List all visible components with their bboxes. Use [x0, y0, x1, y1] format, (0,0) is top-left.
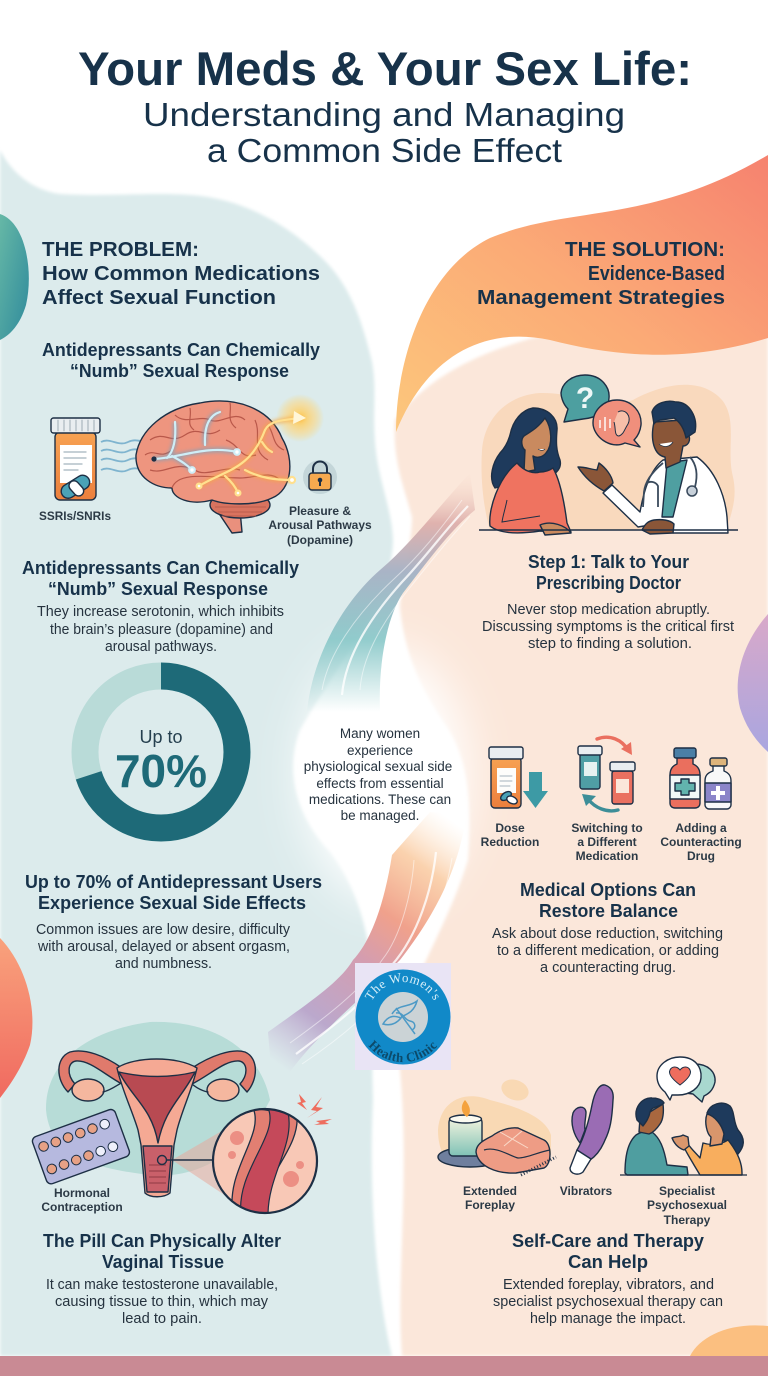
icon: couple in therapy [620, 1057, 747, 1175]
woman hair [492, 408, 560, 488]
text block: antidepressants explanation [22, 558, 299, 655]
right tube and ovary [192, 1051, 255, 1092]
doctor scrubs [662, 460, 687, 517]
speech bubbles with heart [678, 1064, 715, 1102]
labels: medical options: a Different [577, 835, 637, 849]
zoom wedge [172, 1125, 232, 1200]
flowing streaks [268, 473, 475, 1082]
icon: vibrator [570, 1085, 613, 1174]
text block: self-care: Can Help [568, 1252, 648, 1272]
subheading: antidepressants top: “Numb” Sexual Response [70, 361, 289, 381]
text block: antidepressants explanation: Antidepressants Can Chemically [22, 558, 299, 578]
icon: candle and blanket [438, 1076, 556, 1175]
title [78, 42, 692, 169]
text block: side effects prevalence: with arousal, delayed or absent orgasm, [37, 939, 290, 955]
panel: problem background [0, 150, 393, 1356]
heading: the problem: How Common Medications [42, 262, 320, 285]
doctor head [652, 420, 690, 468]
drug signal waves [101, 440, 156, 471]
text block: antidepressants explanation: the brain’s pleasure (dopamine) and [50, 622, 273, 638]
orange bottom blob [690, 1325, 768, 1356]
text block: step 1 [482, 552, 734, 652]
icon: brain with pathways [136, 394, 324, 533]
text block: side effects prevalence [25, 872, 322, 972]
labels: self-care [463, 1184, 727, 1227]
doctor coat [603, 457, 728, 533]
title: Your Meds & Your Sex Life: [78, 42, 692, 95]
center message: be managed. [341, 808, 419, 823]
uterus body [117, 1059, 197, 1197]
icon: padlock [303, 460, 337, 494]
magnified tissue circle [214, 1110, 316, 1212]
text block: the pill: The Pill Can Physically Alter [43, 1231, 281, 1251]
center message: effects from essential [316, 776, 444, 791]
labels: self-care: Extended [463, 1184, 517, 1198]
title: Understanding and Managing [143, 96, 625, 133]
text block: the pill: Vaginal Tissue [102, 1252, 224, 1272]
text block: self-care: help manage the impact. [530, 1311, 686, 1327]
upper ribbon [307, 473, 475, 712]
teal corner blob [0, 214, 29, 340]
illustration: patient and doctor [479, 375, 738, 535]
labels: medical options: Adding a [675, 821, 727, 835]
center message [304, 726, 452, 823]
text block: step 1: Never stop medication abruptly. [507, 602, 710, 618]
icon: dose reduction [489, 747, 548, 808]
text block: antidepressants explanation: arousal pathways. [105, 639, 217, 655]
left tube and ovary [59, 1051, 122, 1092]
purple side blob [738, 614, 768, 752]
illustration: uterus and tissue [46, 1022, 332, 1217]
heading: the solution: Evidence-Based [588, 262, 725, 285]
text block: self-care: Extended foreplay, vibrators, and [503, 1277, 714, 1293]
text block: side effects prevalence: Common issues are low desire, difficulty [36, 922, 291, 938]
logo: women's health clinic: The Women's [364, 973, 439, 1000]
text block: the pill: lead to pain. [122, 1311, 202, 1327]
labels: self-care: Vibrators [560, 1184, 613, 1198]
central white glow [303, 650, 467, 900]
text block: step 1: Discussing symptoms is the critical first [482, 619, 734, 635]
text block: medical options: a counteracting drug. [540, 960, 676, 976]
text block: medical options: Restore Balance [539, 901, 678, 921]
labels: medical options: Reduction [481, 835, 539, 849]
text block: medical options: Ask about dose reduction, switching [492, 926, 723, 942]
label: hormonal contraception [41, 1186, 123, 1214]
text block: self-care [493, 1231, 723, 1327]
serotonin pathways [154, 412, 237, 470]
illustration: patient and doctor: ? [576, 382, 594, 415]
center message: medications. These can [309, 792, 451, 807]
label: hormonal contraception: Contraception [41, 1200, 123, 1214]
text block: the pill: It can make testosterone unavailable, [46, 1277, 278, 1293]
icon: counteracting drugs [670, 748, 731, 809]
heading: the solution [477, 238, 725, 309]
text block: the pill: causing tissue to thin, which may [55, 1294, 269, 1310]
center message: physiological sexual side [304, 759, 452, 774]
label: pleasure and arousal pathways: Pleasure & [289, 504, 351, 518]
dopamine pathways [199, 418, 303, 493]
center message: Many women [340, 726, 420, 741]
label: pleasure and arousal pathways [268, 504, 372, 547]
labels: medical options [481, 821, 742, 863]
pleasure glow [276, 394, 324, 442]
labels: self-care: Psychosexual [647, 1198, 727, 1212]
donut chart: up to 70% [85, 676, 237, 828]
speech bubble: ear [593, 400, 641, 447]
label: pleasure and arousal pathways: Arousal Pathways [268, 518, 372, 532]
label: SSRIs/SNRIs: SSRIs/SNRIs [39, 509, 111, 523]
text block: medical options [492, 880, 723, 976]
subheading: antidepressants top [42, 340, 320, 381]
solution header blob [396, 155, 768, 432]
woman face [522, 418, 551, 472]
heading: the solution: THE SOLUTION: [565, 238, 725, 261]
labels: medical options: Medication [576, 849, 638, 863]
man sweater [625, 1131, 688, 1175]
heading: the problem [42, 238, 320, 309]
text block: antidepressants explanation: They increase serotonin, which inhibits [37, 604, 284, 620]
text block: medical options: to a different medication, or adding [497, 943, 719, 959]
coral side blob [0, 938, 32, 1098]
icon: SSRI pill bottle [51, 418, 100, 501]
subheading: antidepressants top: Antidepressants Can Chemically [42, 340, 320, 360]
labels: self-care: Foreplay [465, 1198, 515, 1212]
icon: pill blister pack [31, 1108, 131, 1185]
logo: women's health clinic: Health Clinic [368, 1040, 437, 1062]
text block: self-care: specialist psychosexual therapy can [493, 1294, 723, 1310]
text block: side effects prevalence: Up to 70% of Antidepressant Users [25, 872, 322, 892]
panel: solution background [395, 300, 768, 1356]
labels: medical options: Switching to [571, 821, 643, 835]
text block: step 1: Prescribing Doctor [536, 573, 681, 593]
text block: medical options: Medical Options Can [520, 880, 696, 900]
labels: self-care: Therapy [664, 1213, 711, 1227]
text block: step 1: Step 1: Talk to Your [528, 552, 689, 572]
text block: antidepressants explanation: “Numb” Sexual Response [48, 579, 268, 599]
donut chart: up to 70%: Up to [139, 727, 183, 747]
woman hair [707, 1103, 743, 1154]
heading: the solution: Management Strategies [477, 286, 725, 309]
woman sweater [684, 1140, 742, 1175]
icon: switching medication [578, 737, 635, 811]
bottom strip [0, 1356, 768, 1376]
woman sweater [490, 463, 571, 533]
labels: medical options: Drug [687, 849, 715, 863]
center message: experience [347, 743, 413, 758]
label: hormonal contraception: Hormonal [54, 1186, 110, 1200]
man head [639, 1104, 663, 1134]
labels: medical options: Dose [495, 821, 525, 835]
speech bubble: question [561, 375, 609, 422]
labels: self-care: Specialist [659, 1184, 715, 1198]
text block: side effects prevalence: and numbness. [115, 956, 212, 972]
backdrop blob [46, 1022, 270, 1176]
table line [479, 529, 738, 531]
donut chart: up to 70%: 70% [115, 745, 207, 797]
title: a Common Side Effect [207, 132, 562, 169]
text block: self-care: Self-Care and Therapy [512, 1231, 704, 1251]
doctor gesturing hand [578, 463, 613, 491]
text block: step 1: step to finding a solution. [528, 636, 692, 652]
heading: the problem: THE PROBLEM: [42, 238, 199, 261]
backdrop blob [481, 385, 735, 530]
logo: women's health clinic [355, 963, 451, 1070]
pain sparks [297, 1094, 332, 1125]
lower ribbon [268, 812, 466, 1082]
stethoscope [643, 457, 697, 507]
text block: the pill [43, 1231, 281, 1327]
woman face [706, 1114, 724, 1146]
labels: medical options: Counteracting [660, 835, 742, 849]
text block: side effects prevalence: Experience Sexual Side Effects [38, 893, 306, 913]
label: pleasure and arousal pathways: (Dopamine) [287, 533, 353, 547]
woman gesturing hand [672, 1135, 689, 1150]
heading: the problem: Affect Sexual Function [42, 286, 276, 309]
